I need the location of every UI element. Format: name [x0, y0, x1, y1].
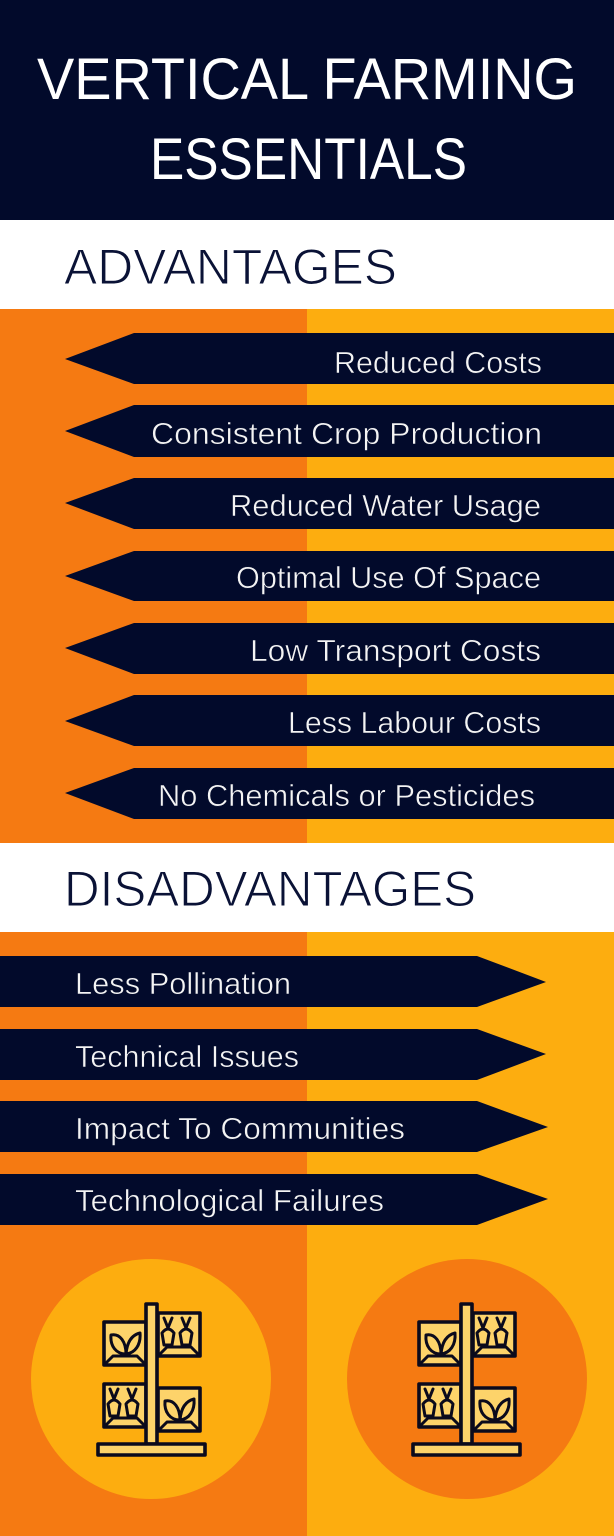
arrow: technical issues: Technical Issues: [75, 1039, 299, 1074]
title banner: ESSENTIALS: [150, 127, 467, 192]
circle: right orange: [347, 1259, 587, 1499]
background: orange left column: [0, 309, 307, 1536]
icon: vertical farm left: [98, 1304, 205, 1455]
heading: disadvantages: [0, 843, 614, 932]
arrow: reduced water usage: Reduced Water Usage: [230, 488, 541, 523]
arrow: technical issues: [0, 1029, 546, 1080]
background: yellow right column: [307, 309, 614, 1536]
heading: advantages: [0, 220, 614, 309]
circle: left yellow: [31, 1259, 271, 1499]
panel: advantages list: [65, 333, 614, 819]
heading: advantages: ADVANTAGES: [64, 239, 397, 295]
arrow: impact to communities: Impact To Communities: [75, 1111, 405, 1146]
icon: vertical farm right: [413, 1304, 520, 1455]
arrow: reduced costs: [65, 333, 614, 384]
arrow: low transport costs: Low Transport Costs: [250, 633, 541, 668]
title banner: VERTICAL FARMING: [37, 47, 577, 112]
title banner: [0, 0, 614, 220]
arrow: technological failures: Technological Failures: [75, 1183, 384, 1218]
arrow: less pollination: Less Pollination: [75, 966, 291, 1001]
arrow: less labour costs: [65, 695, 614, 746]
arrow: optimal use of space: Optimal Use Of Space: [236, 560, 541, 595]
arrow: reduced water usage: [65, 478, 614, 529]
arrow: optimal use of space: [65, 551, 614, 601]
arrow: less pollination: [0, 956, 546, 1007]
arrow: technological failures: [0, 1174, 548, 1225]
arrow: no chemicals or pesticides: No Chemicals or Pesticides: [158, 778, 535, 813]
arrow: consistent crop production: [65, 405, 614, 457]
heading: disadvantages: DISADVANTAGES: [64, 861, 476, 917]
arrow: impact to communities: [0, 1101, 548, 1152]
arrow: consistent crop production: Consistent Crop Production: [151, 416, 542, 451]
arrow: less labour costs: Less Labour Costs: [288, 705, 541, 740]
arrow: reduced costs: Reduced Costs: [334, 345, 542, 380]
arrow: no chemicals or pesticides: [65, 768, 614, 819]
arrow: low transport costs: [65, 623, 614, 674]
panel: disadvantages list: [0, 956, 548, 1225]
